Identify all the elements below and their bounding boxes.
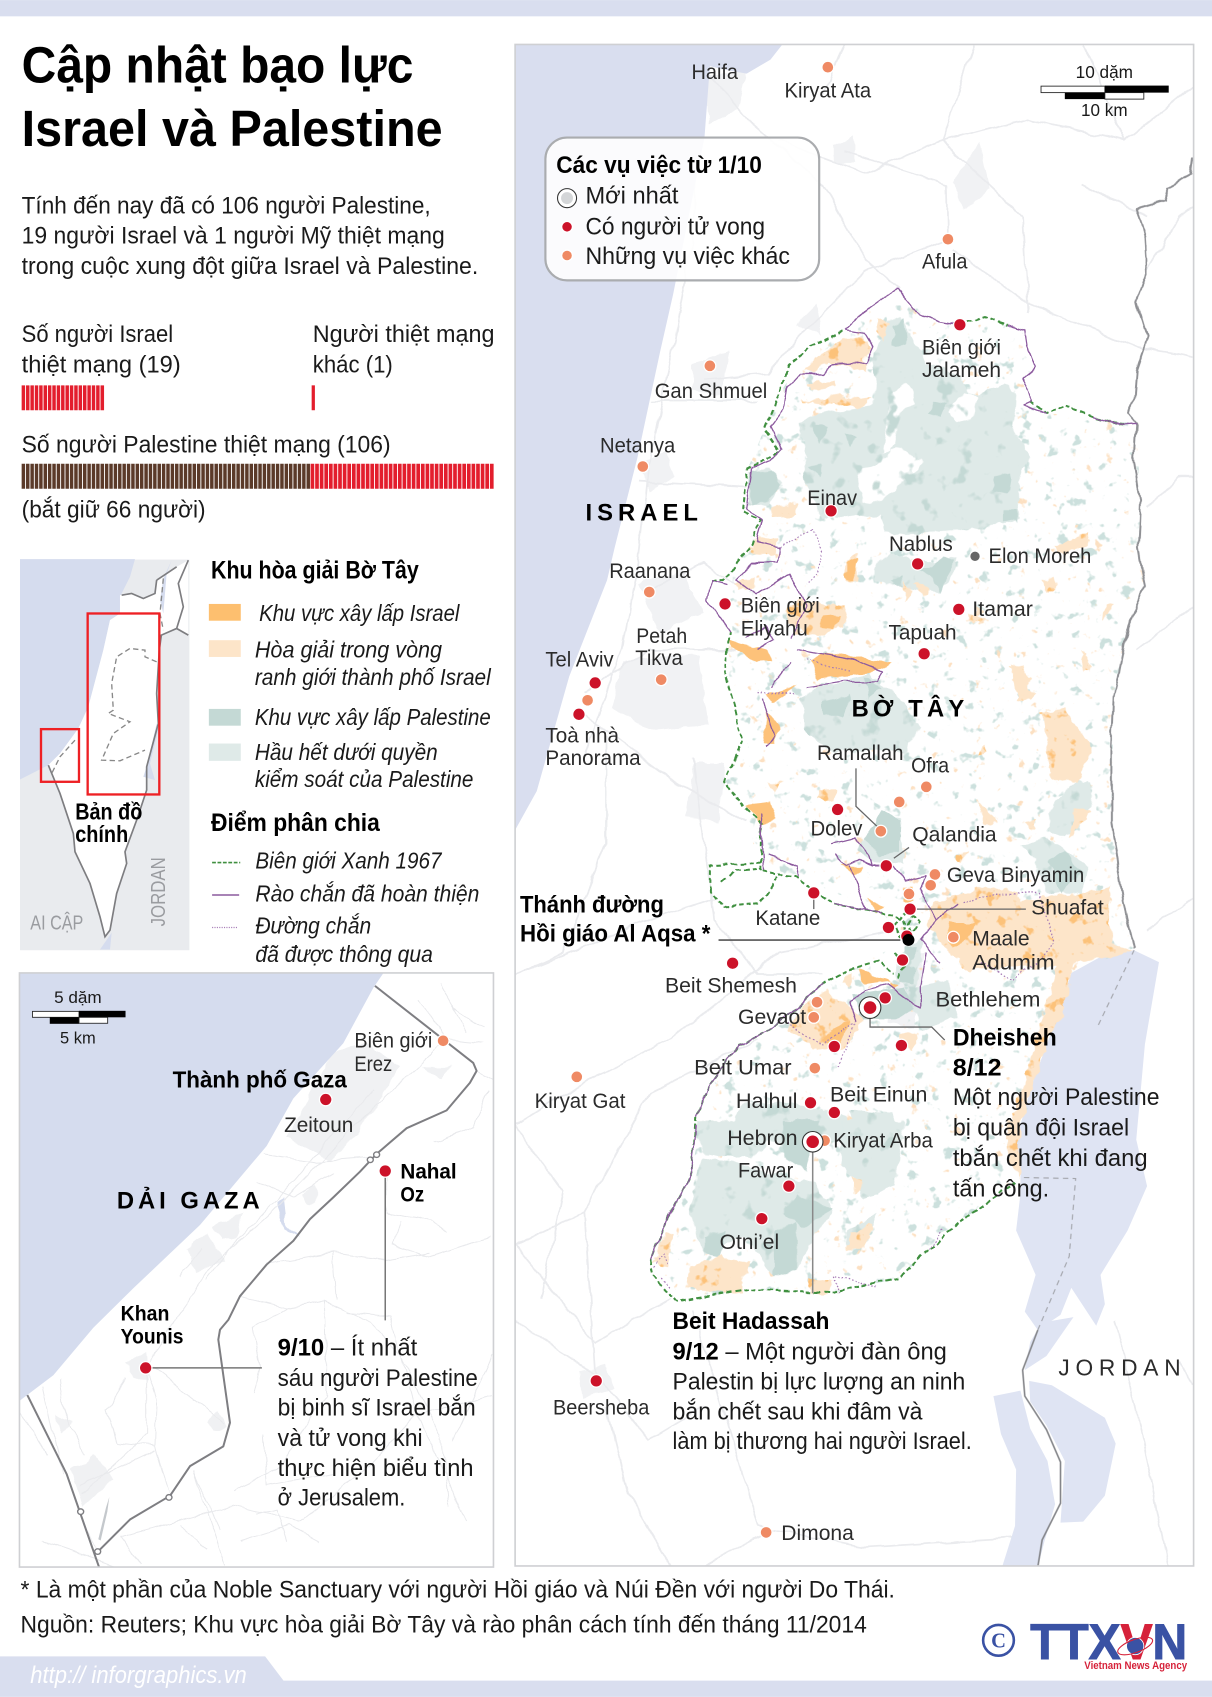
footnote and source: * Là một phần của Noble Sanctuary với người Hồi giáo và Núi Đền với người Do Thái. (21, 1576, 895, 1603)
callout: 9/10: và tử vong khi (278, 1425, 423, 1452)
legend box: incidents: Mới nhất (585, 183, 679, 210)
Jordan River (1111, 157, 1193, 948)
legend: dividing lines: đã được thông qua (255, 941, 433, 967)
panel: locator map: chính (75, 821, 128, 847)
map place labels: Hebron (727, 1125, 798, 1150)
callout: Dheisheh: Một người Palestine (953, 1084, 1160, 1111)
legend box: incidents: Các vụ việc từ 1/10 (556, 152, 762, 179)
marker: Khan Younis with leader (121, 1301, 262, 1374)
marker: Nahal Oz with leader (379, 1159, 457, 1320)
marker: Dheisheh latest (859, 997, 881, 1018)
panel: locator map: Bản đồ (75, 798, 142, 824)
legend: settlement zones: Khu hòa giải Bờ Tây (211, 557, 419, 585)
map place labels: Maale (972, 925, 1030, 950)
map place labels: Einav (807, 485, 857, 510)
chart: Palestinian deaths: Số người Palestine thiệt mạng (106) (22, 431, 391, 458)
legend: settlement zones: kiểm soát của Palestine (255, 766, 473, 792)
map place labels: Adumim (972, 949, 1055, 974)
callout: Dheisheh: tbắn chết khi đang (953, 1145, 1148, 1172)
Israeli settlements (654, 320, 1134, 1293)
label: Gaza Strip: DẢI GAZA (117, 1185, 260, 1214)
map place labels: Beit Shemesh (665, 972, 797, 997)
marker: Gaza City: Thành phố Gaza (173, 1067, 347, 1093)
map place labels: Fawar (738, 1157, 793, 1182)
callout: 9/10: bị binh sĩ Israel bắn (278, 1395, 476, 1422)
map place labels: Kiryat Gat (535, 1088, 625, 1113)
intro text: Tính đến nay đã có 106 người Palestine, (22, 192, 431, 219)
logo: TTXVN: TTXVN (1030, 1614, 1187, 1670)
marker: Gaza City (173, 1067, 353, 1137)
region labels: BỜ TÂY (852, 694, 964, 722)
map place labels: Netanya (600, 432, 676, 457)
map place labels: Tapuah (888, 620, 957, 645)
map place labels: Geva Binyamin (947, 862, 1084, 887)
scattered small patches inside the West Bank (650, 288, 1145, 1302)
logo: TTXVN: Vietnam News Agency (1084, 1660, 1188, 1672)
footnote and source: Nguồn: Reuters; Khu vực hòa giải Bờ Tây và rào phân cách tính đến tháng 11/2014 (21, 1612, 867, 1639)
map place labels: Kiryat Ata (785, 77, 872, 102)
chart: Israeli deaths (22, 321, 181, 398)
marker: Erez crossing (354, 1028, 449, 1076)
chart: other deaths: Người thiệt mạng (313, 321, 495, 348)
chart: Palestinian deaths (22, 431, 495, 523)
callout: Beit Hadassah: bắn chết sau khi đâm và (673, 1398, 923, 1425)
map place labels: Tel Aviv (545, 647, 614, 672)
region labels: JORDAN (1058, 1355, 1181, 1381)
marker: Khan Younis with leader: Younis (121, 1324, 183, 1349)
marker: Hebron latest (802, 1131, 823, 1152)
callout: Beit Hadassah (673, 1308, 972, 1455)
scale bar: main map: 10 km (1081, 100, 1128, 120)
panel: locator map: AI CẬP (30, 912, 83, 935)
legend: settlement zones: Hầu hết dưới quyền (255, 739, 438, 765)
callout: Beit Hadassah: làm bị thương hai người Israel. (673, 1428, 972, 1455)
legend: settlement zones: ranh giới thành phố Israel (255, 664, 492, 690)
callout: Beit Hadassah: Palestin bị lực lượng an ninh (673, 1369, 965, 1396)
markers: other incidents (571, 61, 959, 1538)
callout: 9/10 (278, 1334, 478, 1511)
map place labels: Otni’el (720, 1229, 779, 1254)
roads and urban areas: Israel and Jordan (515, 44, 1194, 1566)
legend: settlement zones: Khu vực xây lấp Palestine (255, 704, 491, 730)
map place labels: Beit Umar (694, 1055, 792, 1080)
1967 Green Line (650, 316, 1123, 1302)
callout: Dheisheh: Dheisheh (953, 1024, 1057, 1051)
Jordan border south (1023, 1330, 1060, 1567)
legend: dividing lines: Rào chắn đã hoàn thiện (255, 881, 479, 907)
legend: dividing lines: Điểm phân chia (211, 809, 380, 837)
map place labels: Ofra (911, 753, 950, 778)
title (22, 36, 443, 157)
map place labels: Gan Shmuel (655, 378, 767, 403)
callout: Beit Hadassah: Beit Hadassah (673, 1308, 829, 1335)
chart: other deaths: khác (1) (313, 351, 393, 378)
Dead Sea and southern ponds (993, 950, 1159, 1567)
scale bar: Gaza: 5 km (60, 1028, 96, 1047)
Palestinian mostly controlled areas (689, 317, 1092, 1275)
map place labels: Jalameh (922, 357, 1001, 382)
legend box: incidents: Có người tử vong (585, 213, 765, 240)
callout: Dheisheh: tấn công. (953, 1175, 1049, 1202)
map place labels: Tikva (635, 645, 684, 670)
footer band with URL (0, 1656, 1212, 1697)
legend box: incidents (545, 138, 819, 280)
map place labels: Haifa (691, 59, 739, 84)
map place labels: Beit Einun (830, 1082, 927, 1107)
callout: 9/10: sáu người Palestine (278, 1365, 478, 1392)
legend: dividing lines: Biên giới Xanh 1967 (255, 848, 443, 874)
map place labels: Nablus (889, 531, 953, 556)
callout: Beit Hadassah: 9/12 – Một người đàn ông (673, 1338, 947, 1365)
marker: Elon Moreh (970, 551, 980, 562)
region labels (585, 500, 1181, 1381)
map place labels: Gevaot (738, 1004, 806, 1029)
callout: 9/10: 9/10 – Ít nhất (278, 1334, 418, 1361)
panel: locator map: JORDAN (147, 857, 170, 926)
legend: settlement zones: Khu vực xây lấp Israel (259, 600, 460, 626)
scale bar: Gaza (32, 988, 126, 1047)
intro text: 19 người Israel và 1 người Mỹ thiệt mạng (22, 223, 445, 250)
map place labels: Kiryat Arba (833, 1128, 934, 1153)
scale bar: main map: 10 dặm (1076, 62, 1133, 82)
map place labels: Dolev (811, 816, 863, 841)
callout: 9/10: ở Jerusalem. (278, 1484, 405, 1511)
sea: Mediterranean (515, 44, 782, 830)
panel: West Bank main map (515, 44, 1194, 1567)
map place labels: Dimona (781, 1520, 855, 1545)
marker: Khan Younis with leader: Khan (121, 1301, 169, 1326)
markers: incidents with deaths (573, 318, 966, 1387)
marker: Nahal Oz with leader: Oz (400, 1181, 424, 1206)
intro text: trong cuộc xung đột giữa Israel và Palestine. (22, 253, 478, 280)
panel: locator map (20, 559, 189, 950)
chart: other deaths (312, 321, 495, 410)
map place labels: Raanana (609, 558, 691, 583)
chart: Israeli deaths: thiệt mạng (19) (22, 351, 181, 378)
map place labels: Toà nhà (545, 722, 620, 747)
top band (0, 0, 1212, 16)
panel: Gaza map (19, 973, 493, 1567)
scale bar: Gaza: 5 dặm (54, 988, 102, 1007)
logo: TTXVN: C (991, 1631, 1006, 1653)
legend box: incidents: Những vụ việc khác (585, 243, 790, 270)
title: Israel và Palestine (22, 100, 443, 157)
callout: 9/10: thực hiện biểu tình (278, 1455, 474, 1482)
legend: settlement zones: Hòa giải trong vòng (255, 637, 442, 663)
map place labels: Eliyahu (741, 615, 808, 640)
chart: Israeli deaths: Số người Israel (22, 321, 173, 348)
marker: Erez crossing: Biên giới (354, 1028, 432, 1053)
map place labels: Elon Moreh (989, 543, 1091, 568)
map place labels: Katane (755, 905, 820, 930)
marker: Gaza City: Zeitoun (284, 1112, 353, 1137)
chart: Palestinian deaths: (bắt giữ 66 người) (22, 496, 206, 523)
separation barrier (650, 288, 1136, 1293)
map place labels: Petah (636, 623, 687, 648)
title: Cập nhật bạo lực (22, 36, 413, 93)
legend: dividing lines: Đường chắn (255, 912, 371, 938)
region labels: ISRAEL (585, 500, 698, 527)
map place labels: Biên giới (741, 592, 820, 617)
legend: settlement zones (209, 557, 492, 792)
marker: Nahal Oz with leader: Nahal (400, 1159, 457, 1184)
footer band with URL: http:// inforgraphics.vn (30, 1662, 247, 1689)
map place labels: Itamar (972, 596, 1033, 621)
scale bar: main map (1041, 62, 1169, 120)
callout: Dheisheh: bị quân đội Israel (953, 1114, 1129, 1141)
dense Israeli built-up settlements (727, 557, 975, 1048)
map place labels: Ramallah (817, 740, 904, 765)
map place labels: Shuafat (1031, 895, 1104, 920)
leader lines (719, 768, 1026, 1293)
label: Al Aqsa: Hồi giáo Al Aqsa * (520, 921, 711, 948)
intro text (22, 192, 478, 280)
marker: Al Aqsa (903, 934, 914, 946)
map place labels: Afula (922, 248, 968, 273)
map place labels: Biên giới (922, 334, 1001, 359)
callout: Dheisheh: 8/12 (953, 1055, 1002, 1082)
marker: Erez crossing: Erez (354, 1051, 392, 1076)
callout: Dheisheh (953, 1024, 1160, 1202)
denser Palestinian built-up areas (703, 320, 1083, 1275)
legend: dividing lines (211, 809, 479, 967)
label: Al Aqsa: Thánh đường (520, 891, 664, 918)
label: Al Aqsa (520, 891, 711, 948)
map place labels: Panorama (545, 745, 642, 770)
footnote and source (21, 1576, 895, 1639)
map place labels: Bethlehem (936, 986, 1040, 1011)
map place labels: Beersheba (553, 1394, 650, 1419)
map place labels: Halhul (736, 1088, 798, 1113)
map place labels (535, 59, 1104, 1545)
map place labels: Qalandia (912, 822, 998, 847)
